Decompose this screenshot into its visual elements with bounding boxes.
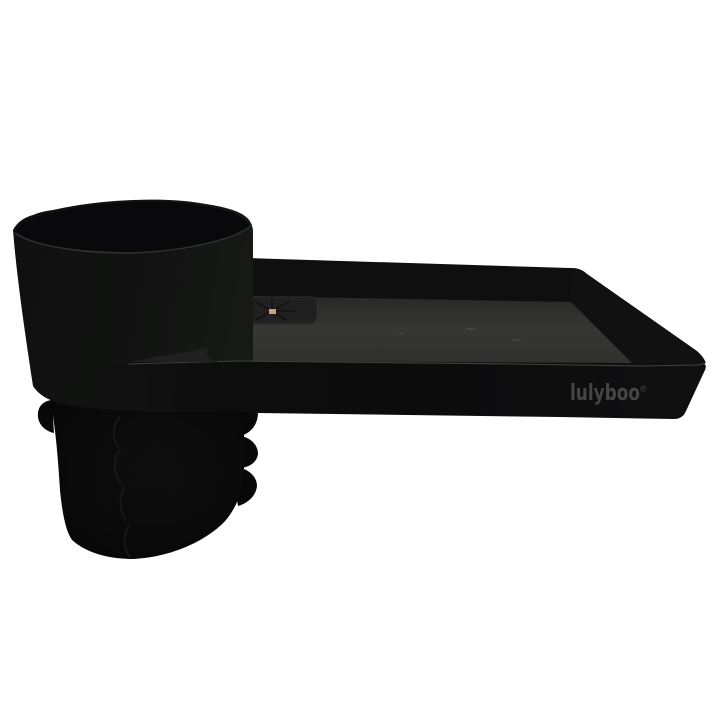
floor scuffs [398,328,521,340]
tray front [100,348,706,419]
cup outer wall [13,200,253,412]
front rim highlight [128,361,705,366]
tray right inner wall [570,268,705,364]
cup opening [16,202,250,252]
clamp grip lobes, right [232,408,258,506]
notch wedge by the cup [128,348,218,362]
cup holder body [13,200,253,412]
tray front band [100,361,706,419]
clamp grip lobes, left [38,400,54,433]
cup rim highlight [15,226,251,253]
clamp centre seam with scallops [114,417,130,557]
registered mark: ® [640,384,647,394]
brand logo: lulyboo [570,381,640,406]
tray interior behind the cup [230,258,706,366]
tan centre dot [269,309,276,314]
clamp base below the cup [38,398,258,559]
tray back wall [245,258,706,366]
clamp body [50,398,244,559]
moulded square with spoke mark [230,297,317,324]
tray floor [245,296,632,363]
